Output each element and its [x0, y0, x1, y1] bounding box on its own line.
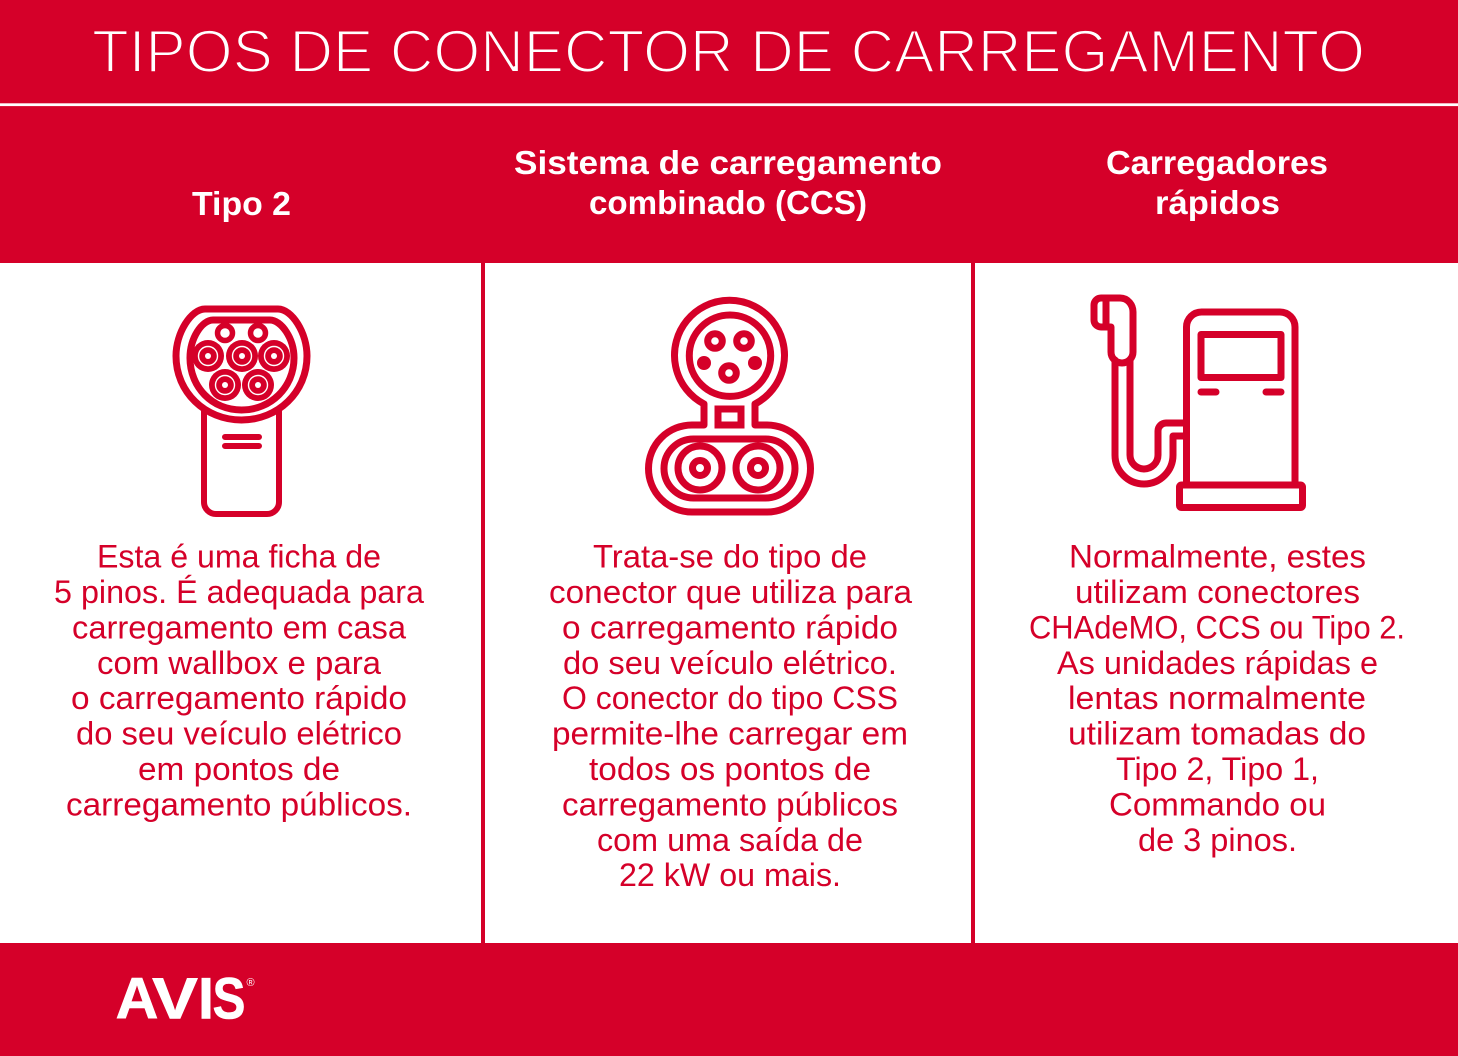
heading: Carregadores rápidos: rápidos	[1155, 184, 1280, 221]
text block: Tipo 2: do seu veículo elétrico	[76, 716, 402, 752]
logo: AVIS: ®	[246, 977, 255, 989]
icon: Type 2 connector	[176, 309, 307, 514]
text block: rapid chargers: As unidades rápidas e	[1057, 645, 1378, 681]
text block: rapid chargers: Tipo 2, Tipo 1,	[1116, 751, 1319, 787]
text block: CCS: permite-lhe carregar em	[552, 716, 908, 752]
text block: CCS: Trata-se do tipo de	[593, 538, 867, 574]
heading: Sistema de carregamento combinado (CCS): Sistema de carregamento	[514, 144, 942, 181]
text block: rapid chargers	[1029, 538, 1405, 858]
text block: CCS: todos os pontos de	[589, 751, 871, 787]
text block: CCS: O conector do tipo CSS	[562, 680, 898, 716]
icon: CCS connector	[648, 300, 810, 512]
heading: Tipo 2: Tipo 2	[192, 185, 291, 222]
text block: CCS: do seu veículo elétrico.	[563, 645, 897, 681]
title: TIPOS DE CONECTOR DE CARREGAMENTO	[92, 18, 1365, 85]
text block: Tipo 2: 5 pinos. É adequada para	[54, 574, 424, 610]
text block: CCS: 22 kW ou mais.	[619, 857, 841, 893]
text block: CCS: carregamento públicos	[562, 786, 898, 822]
heading: Carregadores rápidos: Carregadores	[1106, 144, 1328, 181]
text block: Tipo 2: Esta é uma ficha de	[97, 538, 381, 574]
text block: rapid chargers: utilizam conectores	[1075, 574, 1360, 610]
text block: rapid chargers: lentas normalmente	[1068, 680, 1366, 716]
text block: Tipo 2: carregamento em casa	[72, 609, 406, 645]
text block: rapid chargers: utilizam tomadas do	[1068, 716, 1366, 752]
text block: CCS: conector que utiliza para	[549, 574, 912, 610]
logo: AVIS: I	[198, 967, 214, 1032]
text block: rapid chargers: Normalmente, estes	[1069, 538, 1366, 574]
text block: Tipo 2: o carregamento rápido	[71, 680, 407, 716]
icon: rapid charging station	[1094, 298, 1302, 508]
text block: Tipo 2: em pontos de	[138, 751, 340, 787]
text block: Tipo 2: com wallbox e para	[97, 645, 381, 681]
heading: Carregadores rápidos	[1106, 144, 1328, 221]
text block: rapid chargers: de 3 pinos.	[1138, 822, 1297, 858]
logo: AVIS: A	[116, 967, 158, 1032]
heading: Sistema de carregamento combinado (CCS)	[514, 144, 942, 221]
text block: CCS: o carregamento rápido	[562, 609, 898, 645]
logo: AVIS: S	[212, 967, 246, 1032]
text block: Tipo 2: carregamento públicos.	[66, 786, 412, 822]
text block: rapid chargers: Commando ou	[1109, 786, 1326, 822]
logo: AVIS: V	[152, 967, 198, 1032]
logo: AVIS	[116, 967, 255, 1032]
heading: Sistema de carregamento combinado (CCS): combinado (CCS)	[589, 184, 867, 221]
text block: CCS: com uma saída de	[597, 822, 863, 858]
header band	[0, 0, 1458, 263]
text block: rapid chargers: CHAdeMO, CCS ou Tipo 2.	[1029, 609, 1405, 645]
text block: Tipo 2	[54, 538, 424, 822]
text block: CCS	[549, 538, 912, 893]
footer band	[0, 943, 1458, 1056]
